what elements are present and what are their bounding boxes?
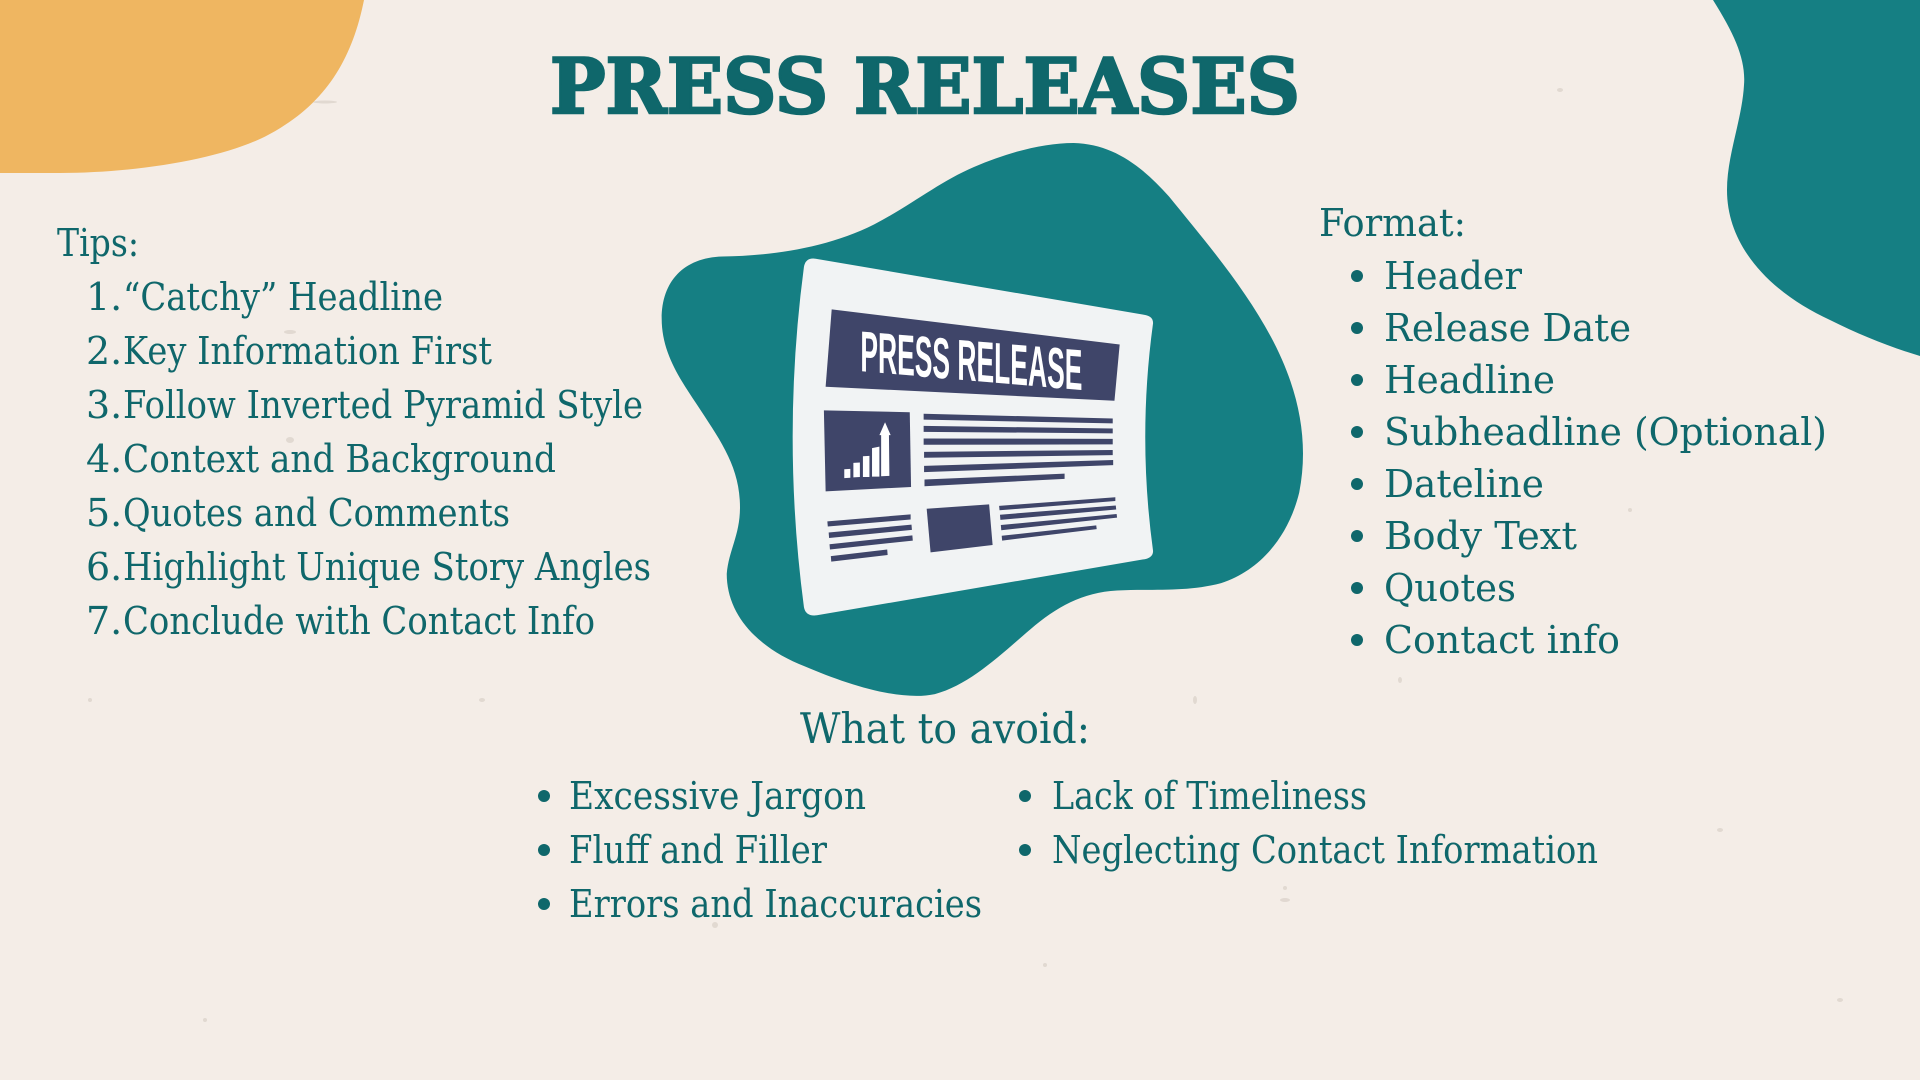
format heading: Format:: [1319, 201, 1466, 245]
chart icon box: [824, 410, 911, 491]
newspaper sheet: [793, 259, 1153, 616]
teal blob: [662, 143, 1303, 696]
format list: Headline: [1384, 358, 1555, 402]
title: PRESS RELEASES: [550, 42, 1300, 131]
orange corner blob: [0, 0, 364, 173]
avoid bullets: [538, 790, 1031, 910]
central illustration: press release newspaper on teal blob: [662, 143, 1303, 696]
tip 4: 4.: [86, 437, 122, 481]
avoid heading: What to avoid:: [800, 704, 1090, 753]
format list: [1384, 254, 1827, 662]
avoid list: Lack of Timeliness: [1052, 774, 1367, 818]
article text lines: [827, 414, 1117, 562]
tips heading: Tips:: [57, 221, 139, 265]
avoid list: Excessive Jargon: [569, 774, 866, 818]
format list: Subheadline (Optional): [1384, 410, 1827, 454]
avoid list: Neglecting Contact Information: [1052, 828, 1598, 872]
panel: tips: [57, 221, 651, 643]
tip 7: 7.: [86, 599, 122, 643]
newspaper banner: [826, 309, 1120, 401]
avoid list: Errors and Inaccuracies: [569, 882, 982, 926]
tip 3: 3.: [86, 383, 122, 427]
tip 2: Key Information First: [123, 329, 492, 373]
panel: format: [1319, 201, 1827, 662]
format list: Quotes: [1384, 566, 1516, 610]
tip 5: 5.: [86, 491, 122, 535]
format list: Dateline: [1384, 462, 1544, 506]
tip 6: Highlight Unique Story Angles: [123, 545, 651, 589]
tip 1: “Catchy” Headline: [123, 275, 443, 319]
tip 2: 2.: [86, 329, 122, 373]
tip 1: 1.: [86, 275, 122, 319]
avoid list: Fluff and Filler: [569, 828, 828, 872]
tip 6: 6.: [86, 545, 122, 589]
format list: Release Date: [1384, 306, 1631, 350]
avoid list: [569, 774, 1598, 926]
format list: Header: [1384, 254, 1523, 298]
tip 4: Context and Background: [123, 437, 556, 481]
tip 3: Follow Inverted Pyramid Style: [123, 383, 643, 427]
format bullets: [1351, 270, 1363, 646]
teal corner blob: [1713, 0, 1920, 356]
tip 5: Quotes and Comments: [123, 491, 510, 535]
tip 7: Conclude with Contact Info: [123, 599, 595, 643]
panel: what to avoid: [538, 704, 1598, 926]
format list: Contact info: [1384, 618, 1620, 662]
format list: Body Text: [1384, 514, 1577, 558]
central illustration: press release newspaper on teal blob: PRESS RELEASE: [860, 320, 1082, 403]
